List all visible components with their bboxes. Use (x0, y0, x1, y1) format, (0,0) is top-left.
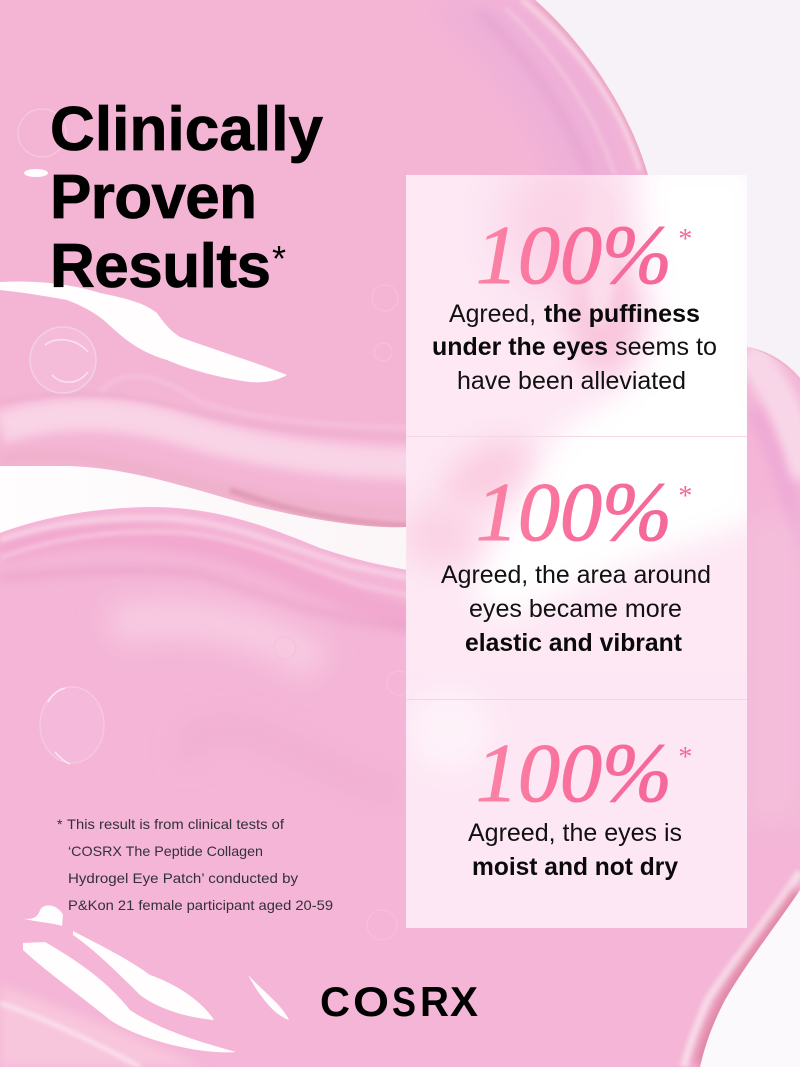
logo: COSRX: X (450, 978, 478, 1025)
bubble: right side droplets (274, 285, 411, 940)
upper pink gel blob (0, 0, 648, 528)
statistic: 100 percent: * (677, 224, 691, 255)
lower pink gel blob (0, 340, 800, 1067)
highlight: white light streaks upper (0, 169, 287, 382)
title: Proven (50, 163, 257, 232)
statement: puffiness: have been alleviated (457, 367, 686, 395)
footnote: P&Kon 21 female participant aged 20-59 (68, 897, 333, 913)
logo: COSRX: S (392, 978, 416, 1025)
background: bottom right white corner (680, 860, 800, 1067)
statement: moisture: moist and not dry (472, 853, 678, 881)
statement: puffiness: the puffiness (544, 300, 700, 328)
highlight: white light streaks lower (15, 905, 289, 1052)
statistic: 100 percent: 100% (476, 466, 672, 559)
background: white gel gap (0, 440, 420, 590)
panel: first result (432, 209, 717, 395)
title: Results (50, 232, 271, 301)
bubble: large lower droplet (40, 687, 104, 764)
statistic: 100 percent: * (677, 742, 691, 773)
statement: elasticity (441, 561, 711, 657)
panel: results card background (406, 175, 747, 928)
statement: moisture (468, 819, 682, 881)
footnote: Hydrogel Eye Patch’ conducted by (68, 870, 298, 886)
title: Clinically (50, 95, 324, 164)
logo: COSRX (320, 978, 478, 1025)
statistic: 100 percent: * (677, 481, 691, 512)
bubble: upper left droplet (18, 109, 66, 157)
statistic: 100 percent: 100% (476, 209, 672, 302)
logo: COSRX: R (420, 978, 449, 1025)
panel: third result (468, 727, 691, 881)
statement: moisture: Agreed, the eyes is (468, 819, 682, 847)
statement: elasticity: Agreed, the area around (441, 561, 711, 589)
title (50, 95, 324, 301)
title: * (272, 238, 286, 279)
footnote (57, 816, 333, 913)
statement: elasticity: elastic and vibrant (465, 629, 683, 657)
footnote: * (57, 816, 63, 832)
footnote: This result is from clinical tests of (67, 816, 284, 832)
bubble: large droplet beside wave (30, 327, 96, 393)
statement: puffiness: Agreed, (449, 300, 536, 328)
statement: puffiness (432, 300, 717, 395)
statistic: 100 percent: 100% (476, 727, 672, 820)
statement: puffiness: seems to (615, 333, 717, 361)
divider (406, 699, 747, 700)
statement: puffiness: under the eyes (432, 333, 608, 361)
divider (406, 436, 747, 437)
panel: second result (441, 466, 711, 657)
footnote: ‘COSRX The Peptide Collagen (68, 843, 263, 859)
logo: COSRX: O (353, 978, 389, 1025)
logo: COSRX: C (320, 978, 350, 1025)
statement: elasticity: eyes became more (469, 595, 682, 623)
